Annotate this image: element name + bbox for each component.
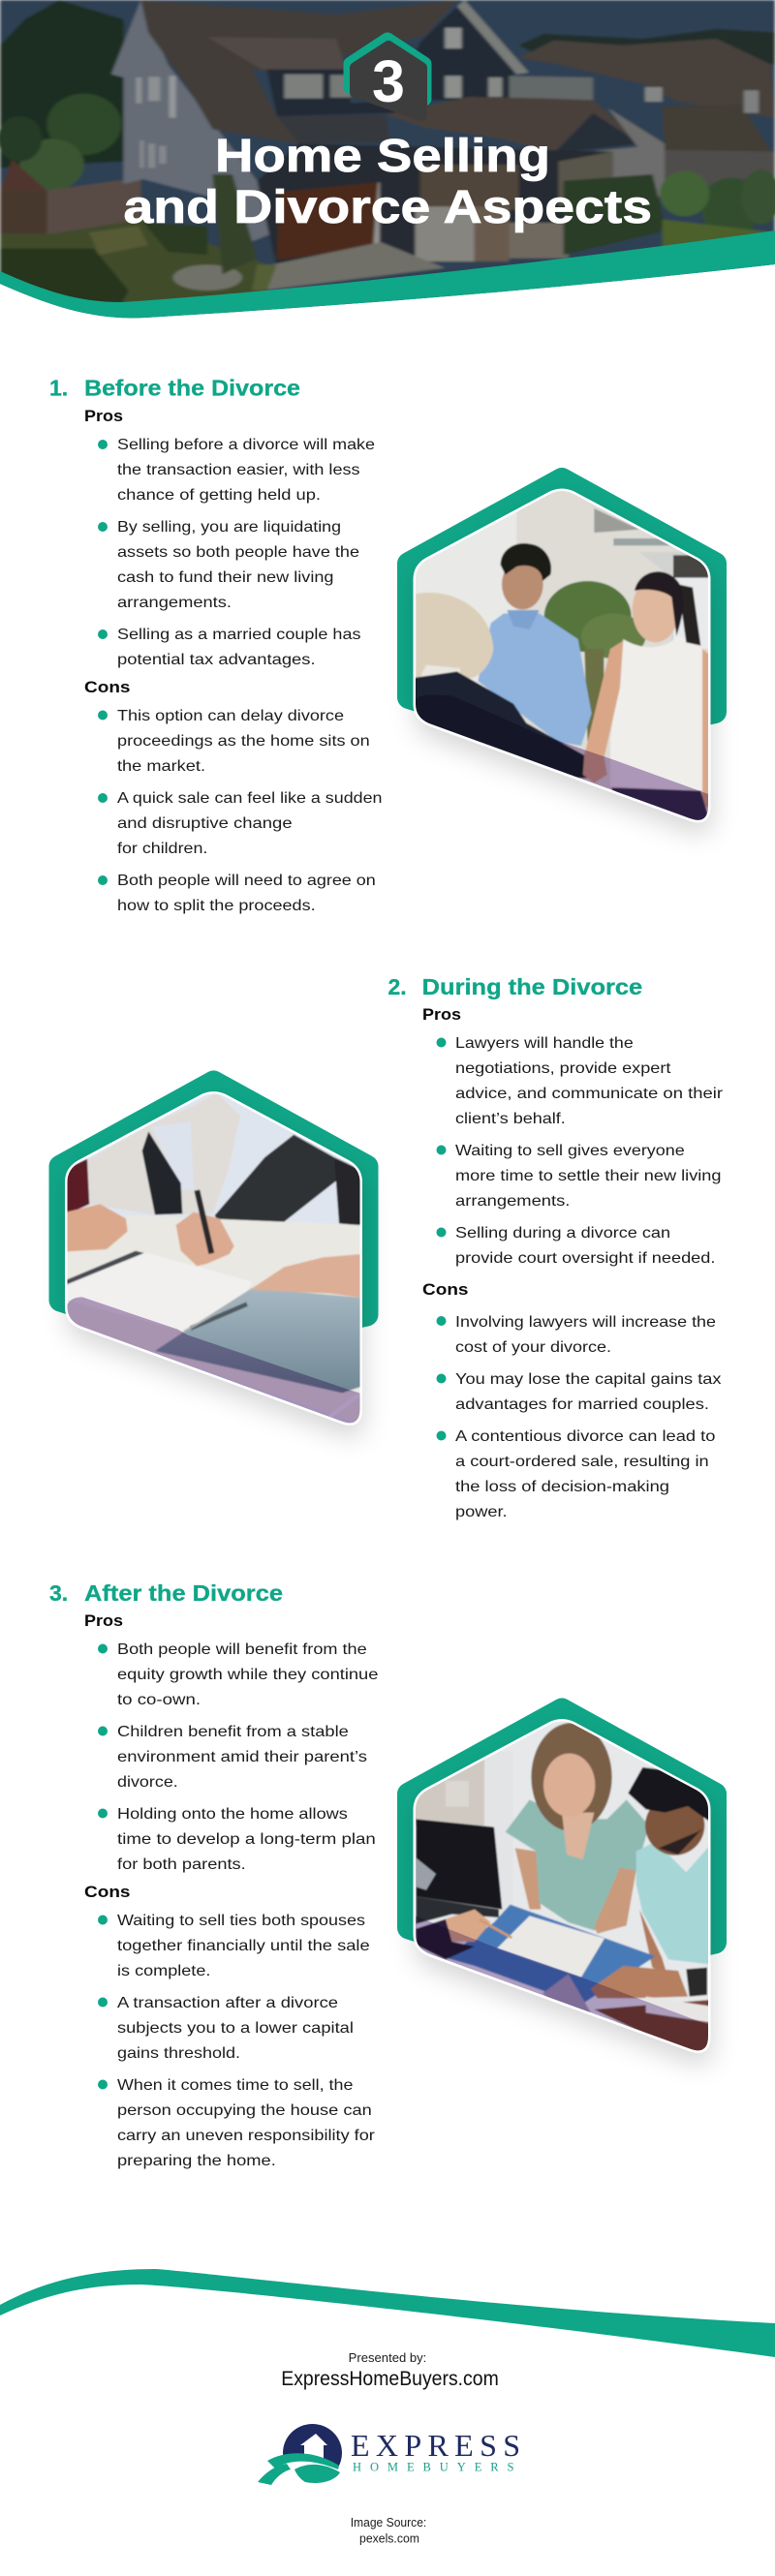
bullet: power.	[455, 1504, 508, 1520]
bullet	[98, 1913, 370, 1979]
purple tint	[68, 1297, 360, 1424]
section 1 heading: 1.	[49, 376, 68, 401]
bullet	[436, 1428, 716, 1520]
bullet	[98, 1995, 354, 2062]
pros label: Pros	[84, 1612, 123, 1630]
bullet: how to split the proceeds.	[117, 898, 316, 914]
bullet: provide court oversight if needed.	[455, 1250, 715, 1267]
presented by	[281, 2350, 499, 2390]
bullet: cash to fund their new living	[117, 569, 333, 586]
bullet: Involving lawyers will increase the	[455, 1314, 716, 1331]
bullet: Selling during a divorce can	[455, 1225, 670, 1242]
header wave	[0, 230, 775, 318]
logo: Express HomeBuyers: HOMEBUYERS	[353, 2460, 514, 2473]
bullet	[436, 1225, 715, 1267]
bullet: Waiting to sell gives everyone	[455, 1143, 685, 1159]
bullet	[98, 1806, 376, 1873]
bullet	[98, 2077, 376, 2169]
bullet: Waiting to sell ties both spouses	[117, 1913, 365, 1929]
logo: Express HomeBuyers: EXPRESS	[351, 2428, 520, 2463]
bullet: to co-own.	[117, 1692, 201, 1708]
bullet: By selling, you are liquidating	[117, 519, 341, 536]
number badge: 3	[372, 48, 405, 114]
cons label: Cons	[84, 679, 130, 696]
bullet: for both parents.	[117, 1856, 246, 1873]
bullet: A transaction after a divorce	[117, 1995, 338, 2011]
bullet: divorce.	[117, 1774, 178, 1791]
bullet	[98, 790, 382, 857]
bullet	[98, 1641, 379, 1708]
bullet: and disruptive change	[117, 815, 293, 832]
section 3: after the divorce	[49, 1580, 379, 2169]
section 3 heading: After the Divorce	[84, 1580, 283, 1606]
section 2: during the divorce	[388, 974, 724, 1520]
bullet: A quick sale can feel like a sudden	[117, 790, 382, 807]
bullet: the transaction easier, with less	[117, 462, 360, 478]
bullet: This option can delay divorce	[117, 708, 344, 724]
bullet: negotiations, provide expert	[455, 1060, 671, 1077]
bullet	[98, 627, 360, 668]
cons label: Cons	[84, 1884, 130, 1901]
bullet: Selling as a married couple has	[117, 627, 360, 643]
image source: pexels.com	[359, 2531, 419, 2545]
bullet: advice, and communicate on their	[455, 1086, 724, 1102]
bullet: arrangements.	[117, 595, 232, 611]
bullet: A contentious divorce can lead to	[455, 1428, 716, 1445]
bullet: Both people will need to agree on	[117, 873, 376, 889]
title: Home Selling	[215, 131, 550, 182]
presented by: ExpressHomeBuyers.com	[281, 2368, 499, 2390]
logo: Express HomeBuyers	[258, 2424, 520, 2485]
bullet: You may lose the capital gains tax	[455, 1371, 721, 1388]
bullet: Selling before a divorce will make	[117, 437, 375, 453]
footer wave	[0, 2269, 775, 2357]
bullet: client’s behalf.	[455, 1111, 566, 1127]
bullet: When it comes time to sell, the	[117, 2077, 354, 2094]
bullet: person occupying the house can	[117, 2102, 372, 2119]
bullet: potential tax advantages.	[117, 652, 316, 668]
section 1: before the divorce	[49, 376, 382, 914]
bullet: time to develop a long-term plan	[117, 1831, 376, 1848]
bullet	[436, 1314, 716, 1356]
purple tint	[416, 1916, 708, 2051]
presented by: Presented by:	[349, 2350, 426, 2365]
bullet: arrangements.	[455, 1193, 570, 1210]
pros label: Pros	[422, 1006, 461, 1024]
bullet: cost of your divorce.	[455, 1339, 611, 1356]
bullet: subjects you to a lower capital	[117, 2020, 354, 2037]
bullet	[436, 1371, 721, 1413]
bullet: Lawyers will handle the	[455, 1035, 634, 1052]
section 3 heading: 3.	[49, 1580, 68, 1606]
bullet: chance of getting held up.	[117, 487, 321, 504]
bullet	[436, 1143, 721, 1210]
bullet: the loss of decision-making	[455, 1479, 669, 1495]
bullet	[98, 519, 359, 611]
bullet: more time to settle their new living	[455, 1168, 721, 1184]
bullet: a court-ordered sale, resulting in	[455, 1454, 709, 1470]
bullet: advantages for married couples.	[455, 1396, 709, 1413]
bullet: equity growth while they continue	[117, 1667, 379, 1683]
hexagon photo 3: couple reviewing paperwork	[388, 1690, 736, 2077]
bullet: the market.	[117, 758, 205, 775]
bullet: together financially until the sale	[117, 1938, 370, 1954]
bullet	[98, 1724, 367, 1791]
number badge	[351, 40, 424, 115]
bullet	[98, 873, 376, 914]
bullet: gains threshold.	[117, 2045, 240, 2062]
bullet: Holding onto the home allows	[117, 1806, 348, 1823]
bullet: Children benefit from a stable	[117, 1724, 349, 1740]
hexagon photo 1: couple meeting agent	[388, 455, 736, 843]
bullet	[98, 437, 375, 504]
title	[124, 131, 652, 233]
bullet	[436, 1035, 724, 1127]
image source: Image Source:	[351, 2515, 426, 2530]
bullet	[98, 708, 370, 775]
purple tint	[416, 695, 708, 820]
image source	[351, 2515, 426, 2545]
bullet: Both people will benefit from the	[117, 1641, 367, 1658]
header photo: suburban house	[0, 0, 775, 322]
pros label: Pros	[84, 408, 123, 425]
title: and Divorce Aspects	[124, 182, 652, 233]
bullet: assets so both people have the	[117, 544, 359, 561]
bullet: preparing the home.	[117, 2153, 276, 2169]
section 2 heading: 2.	[388, 974, 407, 999]
section 2 heading: During the Divorce	[422, 974, 642, 999]
bullet: environment amid their parent’s	[117, 1749, 367, 1765]
bullet: carry an uneven responsibility for	[117, 2128, 376, 2144]
bullet: for children.	[117, 841, 207, 857]
section 1 heading: Before the Divorce	[84, 376, 300, 401]
cons label: Cons	[422, 1281, 469, 1299]
hexagon photo 2: signing document	[39, 1060, 388, 1448]
bullet: is complete.	[117, 1963, 210, 1979]
bullet: proceedings as the home sits on	[117, 733, 370, 750]
